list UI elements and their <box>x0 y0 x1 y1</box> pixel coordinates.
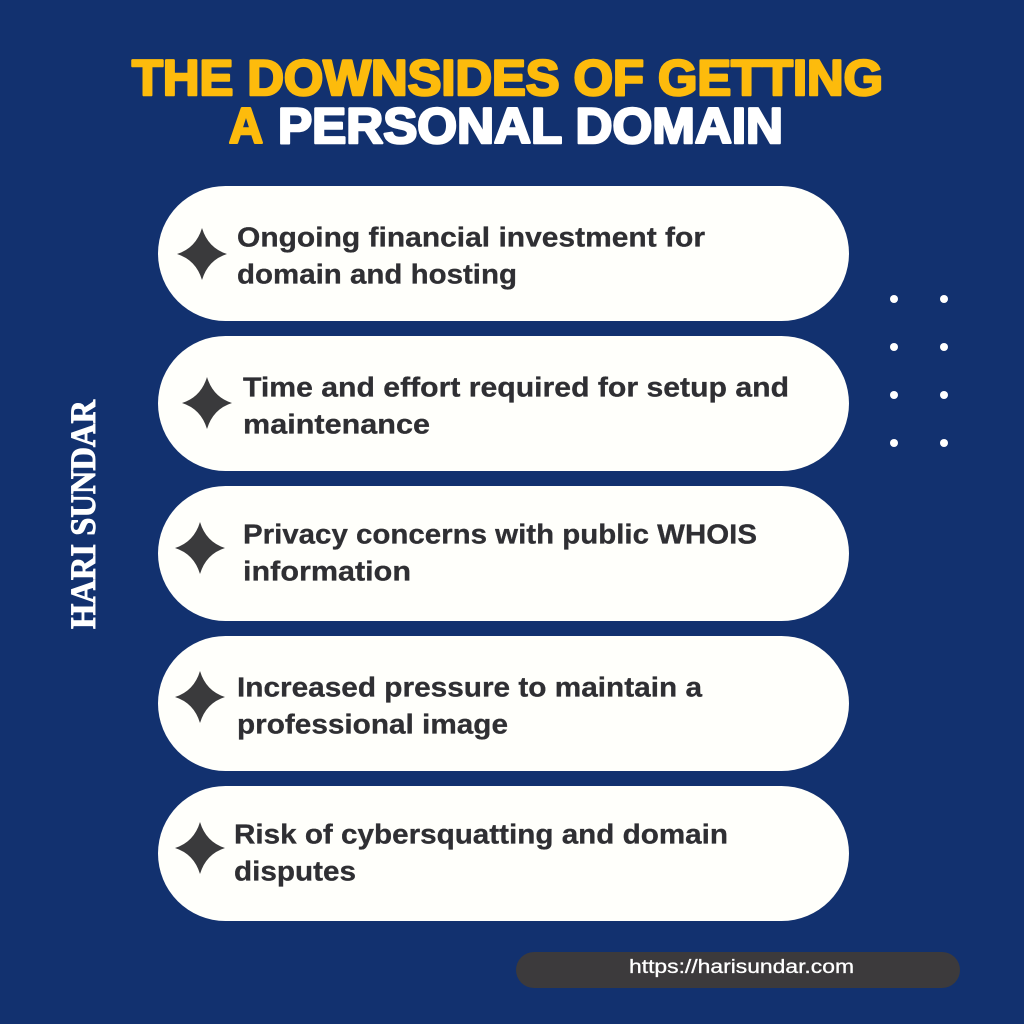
panel: downside 1 <box>158 186 849 321</box>
icon: star <box>175 671 225 723</box>
panel: downside 3 <box>158 486 849 621</box>
icon: star <box>175 822 225 874</box>
text: downside 5: disputes <box>234 856 356 886</box>
icon: star <box>177 228 227 280</box>
title: PERSONAL DOMAIN <box>278 98 783 154</box>
text: downside 1 <box>237 222 705 290</box>
vertical brand name: HARI SUNDAR <box>63 399 103 629</box>
text: downside 2: maintenance <box>243 408 430 440</box>
website pill <box>516 952 960 988</box>
text: downside 1: domain and hosting <box>237 258 517 290</box>
text: downside 4: professional image <box>237 708 508 740</box>
text: downside 3: Privacy concerns with public WHOIS <box>243 518 757 550</box>
decorative dot grid <box>890 295 948 447</box>
text: downside 3 <box>243 518 757 586</box>
panel: downside 5 <box>158 786 849 921</box>
title: THE DOWNSIDES OF GETTING <box>132 50 883 106</box>
text: downside 5 <box>234 818 728 886</box>
text: downside 3: information <box>243 556 411 586</box>
text: downside 4 <box>237 672 702 740</box>
panel: downside 2 <box>158 336 849 471</box>
text: downside 1: Ongoing financial investment for <box>237 222 705 252</box>
title: A <box>229 98 263 154</box>
text: downside 5: Risk of cybersquatting and domain <box>234 818 728 850</box>
icon: star <box>175 522 225 574</box>
text: downside 2 <box>243 372 789 440</box>
text: downside 2: Time and effort required for setup and <box>243 372 789 402</box>
text: downside 4: Increased pressure to maintain a <box>237 672 702 702</box>
website url: https://harisundar.com <box>629 957 854 978</box>
icon: star <box>182 377 232 429</box>
panel: downside 4 <box>158 636 849 771</box>
title <box>132 50 883 154</box>
